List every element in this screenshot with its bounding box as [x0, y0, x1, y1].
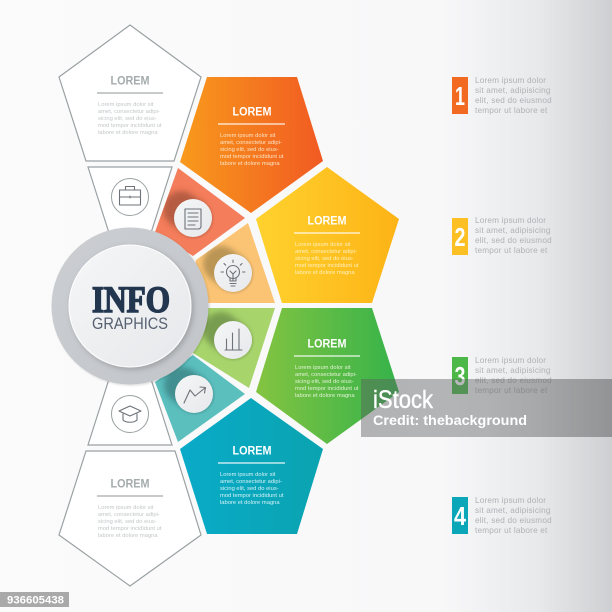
subtitle: GRAPHICS: GRAPHICS [92, 315, 168, 333]
text: bottom outline body: amet, consectetur adipi- [98, 512, 160, 518]
panel: orange pentagon [180, 77, 323, 213]
heading: green: LOREM [308, 336, 346, 350]
legend text 2: Lorem ipsum dolor [475, 216, 546, 225]
text: orange body: amet, consectetur adipi- [220, 140, 282, 146]
text: orange body: labore et dolore magna [220, 161, 280, 167]
title: INFO: INFO [92, 280, 170, 321]
watermark: credit: Credit: thebackground [373, 412, 527, 428]
legend item 2 [452, 216, 552, 255]
text: green body: amet, consectetur adipi- [295, 372, 357, 378]
watermark banner [361, 379, 612, 437]
panel: bottom outline pentagon [59, 451, 201, 586]
text: yellow body: Lorem ipsum dolor sit [295, 242, 351, 248]
text: bottom outline body: labore et dolore magna [98, 533, 158, 539]
text: blue body: labore et dolore magna [220, 500, 280, 506]
heading: blue: LOREM [232, 444, 272, 458]
legend text 1: sit amet, adipisicing [475, 86, 551, 95]
legend text 3: Lorem ipsum dolor [475, 356, 546, 365]
heading: bottom outline: LOREM [110, 476, 150, 490]
heading: yellow: LOREM [308, 214, 346, 228]
legend item 1 [452, 76, 552, 115]
legend text 3: sit amet, adipisicing [475, 366, 551, 375]
text: top outline body: amet, consectetur adipi- [98, 109, 160, 115]
image id tag [0, 592, 69, 607]
number 2: 2 [454, 222, 466, 252]
text: bottom outline body: mod tempor incididunt ut [98, 526, 162, 532]
panel: top outline pentagon [59, 25, 201, 161]
legend item 4 [452, 496, 552, 535]
text: bottom outline body: sicing elit, sed do eius- [98, 519, 157, 525]
text: top outline body: sicing elit, sed do eius- [98, 116, 157, 122]
text: blue body: amet, consectetur adipi- [220, 479, 282, 485]
text: orange body: mod tempor incididunt ut [220, 154, 284, 160]
text: bottom outline body: Lorem ipsum dolor sit [98, 505, 154, 511]
text: top outline body: Lorem ipsum dolor sit [98, 102, 154, 108]
text: yellow body: sicing elit, sed do eius- [295, 256, 354, 262]
legend text 2: tempor ut labore et [475, 246, 548, 255]
panel: light green tile [190, 308, 275, 388]
text: yellow body: amet, consectetur adipi- [295, 249, 357, 255]
text: yellow body: mod tempor incididunt ut [295, 263, 359, 269]
legend text 1: Lorem ipsum dolor [475, 76, 546, 85]
panel: coral tile [155, 168, 245, 256]
legend text 3: elit, sed do eiusmod [475, 376, 552, 385]
legend text 2: elit, sed do eiusmod [475, 236, 552, 245]
text: yellow body: labore et dolore magna [295, 270, 355, 276]
text: top outline body: mod tempor incididunt ut [98, 123, 162, 129]
icon: briefcase [112, 178, 148, 216]
text: orange body: sicing elit, sed do eius- [220, 147, 279, 153]
legend text 1: tempor ut labore et [475, 106, 548, 115]
icon: document [174, 199, 212, 237]
legend text 1: elit, sed do eiusmod [475, 96, 552, 105]
panel: peach tile [190, 223, 275, 303]
legend text 4: sit amet, adipisicing [475, 506, 551, 515]
legend text 3: tempor ut labore et [475, 386, 548, 395]
panel: bottom outline trapezoid [88, 376, 172, 445]
center circle: info graphics [52, 228, 208, 384]
text: top outline body: labore et dolore magna [98, 130, 158, 136]
legend text 4: tempor ut labore et [475, 526, 548, 535]
number 1: 1 [455, 81, 465, 111]
text: green body: mod tempor incididunt ut [295, 386, 359, 392]
text: blue body: sicing elit, sed do eius- [220, 486, 279, 492]
legend text 4: Lorem ipsum dolor [475, 496, 546, 505]
panel: blue pentagon [180, 398, 323, 534]
icon: trend arrow [175, 375, 213, 413]
number 3: 3 [454, 361, 466, 391]
icon: graduation cap [112, 396, 148, 432]
panel: yellow pentagon [256, 167, 399, 303]
text: blue body: Lorem ipsum dolor sit [220, 472, 276, 478]
panel: teal tile [155, 355, 245, 442]
icon: light bulb [214, 254, 252, 292]
text: green body: sicing elit, sed do eius- [295, 379, 354, 385]
watermark: iStock: iStock [373, 386, 433, 414]
number 4: 4 [454, 501, 466, 531]
legend text 4: elit, sed do eiusmod [475, 516, 552, 525]
heading: orange: LOREM [232, 104, 272, 118]
text: orange body: Lorem ipsum dolor sit [220, 133, 276, 139]
legend item 3 [452, 356, 552, 395]
heading: top outline: LOREM [110, 74, 150, 88]
text: green body: Lorem ipsum dolor sit [295, 365, 351, 371]
legend text 2: sit amet, adipisicing [475, 226, 551, 235]
image id tag: 936605438 [7, 594, 64, 606]
panel: green pentagon [256, 308, 399, 444]
icon: bar chart [214, 321, 252, 359]
text: green body: labore et dolore magna [295, 393, 355, 399]
panel: top outline trapezoid [88, 167, 172, 236]
text: blue body: mod tempor incididunt ut [220, 493, 284, 499]
